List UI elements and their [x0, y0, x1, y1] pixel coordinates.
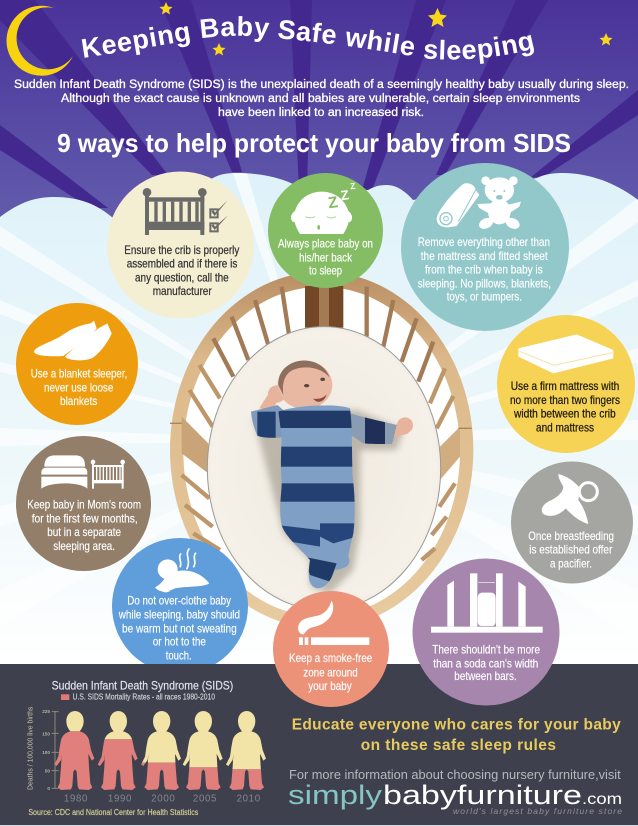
- baby photo illustration: [247, 361, 413, 593]
- text: while sleeping, baby should: [118, 607, 240, 621]
- y axis: 150: [42, 731, 50, 736]
- baby pictogram 2010: [226, 711, 266, 790]
- text: toys, or bumpers.: [447, 290, 522, 304]
- bottom dark panel: [0, 664, 638, 825]
- panel: blanket sleeper: [16, 303, 138, 425]
- text: than a soda can's width: [433, 656, 538, 670]
- text: any question, call the: [135, 271, 229, 285]
- text: sleeping. No pillows, blankets,: [418, 276, 551, 290]
- text: Ensure the crib is properly: [124, 243, 239, 257]
- main heading: 9 ways to help protect your baby from SIDS: [57, 128, 571, 158]
- baby pictogram 2000: [141, 711, 181, 790]
- y axis: 225: [42, 709, 50, 714]
- text: [118, 594, 240, 663]
- crib side panels: [182, 417, 208, 473]
- crib rim joints: [170, 423, 472, 428]
- intro paragraph: have been linked to an increased risk.: [218, 107, 424, 119]
- logo: simplybabyfurniture.com: world's largest baby furniture store: [453, 806, 622, 816]
- star: [600, 33, 612, 46]
- logo: simplybabyfurniture.com: .com: [582, 791, 622, 808]
- text: width between the crib: [513, 407, 616, 421]
- white light rays: [0, 173, 638, 519]
- text: [510, 379, 620, 435]
- dark sky rays: [0, 0, 638, 208]
- text: zone around: [303, 666, 358, 680]
- intro paragraph: Sudden Infant Death Syndrome (SIDS) is the unexplained death of a seemingly healthy baby usually during sleep.: [14, 79, 629, 91]
- year labels: 1980: [64, 793, 88, 804]
- baby hands: [259, 385, 413, 437]
- icon: cigarette: [298, 601, 369, 645]
- text: never use loose: [44, 381, 114, 395]
- text: from the crib when baby is: [425, 262, 543, 276]
- crib rim: [170, 272, 473, 628]
- text: or hot to the: [153, 635, 206, 649]
- text: [289, 651, 373, 693]
- text: [31, 367, 127, 408]
- icon: rolled blanket and teddy bear: [437, 176, 521, 231]
- baby shadow: [253, 410, 403, 593]
- panel: clear the crib: [401, 163, 569, 331]
- icon: mattress: [518, 334, 613, 373]
- baby pictogram 1980: [54, 711, 94, 790]
- call to action: [292, 716, 621, 754]
- text: [418, 235, 551, 304]
- panel: back to sleep: [268, 173, 383, 288]
- baby pictogram 2005: [182, 711, 222, 790]
- text: Use a firm mattress with: [511, 379, 619, 393]
- panel: smoke-free: [273, 591, 389, 707]
- logo: simplybabyfurniture.com: [288, 780, 622, 816]
- text: a pacifier.: [550, 556, 592, 570]
- y axis: [26, 706, 59, 791]
- text: Remove everything other than: [418, 235, 550, 249]
- year labels: 1990: [108, 793, 132, 804]
- crib slats: [182, 287, 455, 560]
- source: Source: CDC and National Center for Health Statistics: [28, 808, 198, 817]
- panel: pacifier: [511, 462, 633, 584]
- text: your baby: [308, 679, 352, 693]
- icon: crib bars and soda can: [431, 573, 543, 633]
- text: Once breastfeeding: [528, 529, 614, 543]
- baby sleeper: [247, 403, 400, 593]
- text: and mattress: [536, 421, 594, 435]
- icon: baby with heat waves: [155, 548, 209, 592]
- icon: sleeping baby head: [291, 181, 357, 234]
- moon: [7, 6, 73, 76]
- text: [124, 243, 239, 298]
- panel: same room: [16, 436, 151, 571]
- icon: sleeping baby head: Z: [349, 181, 357, 191]
- crib illustration: [170, 272, 473, 628]
- text: There shouldn't be more: [432, 642, 540, 656]
- text: blankets: [60, 394, 97, 408]
- star: [428, 8, 447, 27]
- panel: bar spacing: [412, 558, 560, 706]
- year labels: 2000: [151, 793, 175, 804]
- legend: U.S. SIDS Mortality Rates - all races 1980-2010: [73, 693, 215, 702]
- text: sleeping area.: [53, 539, 115, 553]
- y axis: 50: [45, 768, 50, 773]
- more information line: For more information about choosing nursery furniture,visit: [289, 767, 621, 782]
- night sky background: [0, 0, 638, 240]
- text: touch.: [166, 649, 192, 663]
- y axis: 100: [42, 750, 50, 755]
- crib headboard post: [305, 286, 343, 328]
- star: [160, 2, 172, 14]
- text: [27, 497, 141, 553]
- y axis: 0: [47, 786, 50, 791]
- call to action: Educate everyone who cares for your baby: [292, 716, 621, 733]
- panel: firm mattress: [497, 315, 635, 453]
- baby head: [278, 361, 332, 409]
- title: Keeping Baby Safe while sleeping: [82, 16, 534, 64]
- intro paragraph: Although the exact cause is unknown and all babies are vulnerable, certain sleep environments: [61, 93, 580, 105]
- logo: simplybabyfurniture.com: babyfurniture: [383, 780, 582, 810]
- text: Use a blanket sleeper,: [31, 367, 127, 381]
- text: but in a separate: [47, 525, 121, 539]
- panel: do not over-clothe: [112, 538, 248, 674]
- text: to sleep: [309, 263, 342, 277]
- baby pictogram 1990: [98, 711, 138, 790]
- call to action: on these safe sleep rules: [361, 737, 556, 754]
- year labels: 2005: [193, 793, 217, 804]
- y axis: Deaths / 100,000 live births: [26, 706, 35, 790]
- text: Always place baby on: [278, 236, 373, 250]
- text: Do not over-clothe baby: [127, 594, 231, 608]
- icon: crib with checkmarks: [143, 188, 228, 235]
- year labels: 2010: [237, 793, 261, 804]
- icon: bed and crib: [41, 455, 125, 489]
- text: his/her back: [299, 250, 353, 264]
- text: the mattress and fitted sheet: [421, 249, 548, 263]
- text: [278, 236, 373, 277]
- text: between bars.: [454, 669, 517, 683]
- icon: sleeper socks: [34, 321, 112, 360]
- text: is established offer: [529, 543, 612, 557]
- year labels: [64, 793, 261, 804]
- panel: crib assembly: [107, 172, 254, 318]
- icon: sleeping baby head: Z: [327, 194, 339, 212]
- text: manufacturer: [153, 284, 212, 298]
- icon: sleeping baby head: Z: [340, 187, 350, 203]
- chart title: Sudden Infant Death Syndrome (SIDS): [52, 679, 233, 692]
- text: for the first few months,: [32, 511, 138, 525]
- star: [212, 43, 226, 56]
- text: Keep baby in Mom's room: [27, 497, 141, 511]
- text: [528, 529, 614, 570]
- text: [432, 642, 540, 683]
- intro paragraph: [14, 79, 629, 119]
- icon: pacifier: [542, 474, 597, 524]
- text: be warm but not sweating: [122, 621, 237, 635]
- cloud background: [0, 173, 638, 664]
- mattress: [207, 327, 441, 610]
- chart: SIDS mortality rates: [26, 679, 270, 817]
- logo: simplybabyfurniture.com: simply: [288, 780, 383, 810]
- text: assembled and if there is: [127, 257, 237, 271]
- text: Keep a smoke-free: [289, 651, 373, 665]
